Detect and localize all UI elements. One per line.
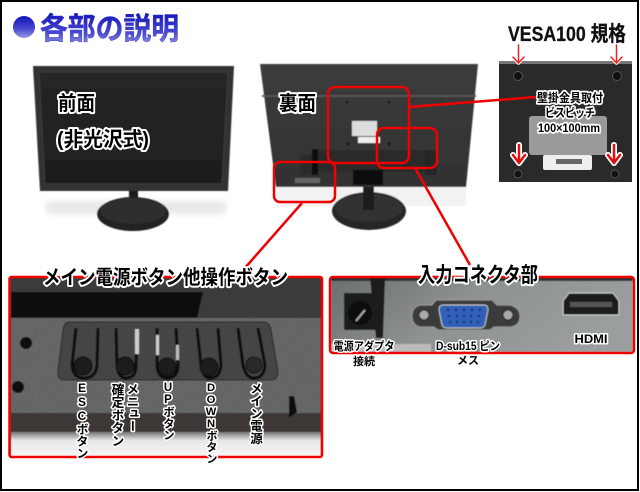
panel border	[10, 277, 322, 457]
label: front: (非光沢式)	[57, 128, 149, 151]
HDMI port	[563, 293, 619, 315]
photo: connector close-up	[331, 277, 633, 352]
button labels: メニュー	[125, 383, 139, 432]
heading: buttons: メイン電源ボタン他操作ボタン	[43, 266, 288, 289]
callouts: red highlight boxes and connector lines	[244, 87, 536, 269]
photo: monitor back	[260, 64, 478, 230]
panel border	[330, 277, 634, 353]
connector labels	[334, 332, 608, 368]
photo: monitor front	[33, 66, 234, 231]
connector labels: メス	[457, 355, 479, 367]
button labels: UPボタン	[162, 382, 175, 440]
button labels: DOWNボタン	[205, 382, 218, 464]
panel: power and operation buttons	[10, 266, 322, 464]
label: back: 裏面	[279, 92, 316, 115]
connector labels: 電源アダプタ	[334, 339, 394, 353]
label: front	[57, 92, 149, 151]
label: wall mount pitch: 壁掛金具取付	[537, 90, 603, 105]
button labels: メイン電源	[248, 382, 262, 445]
panel: input connectors	[330, 264, 634, 368]
label: front: 前面	[58, 92, 95, 115]
arrows: VESA screw positions	[513, 45, 622, 163]
button labels: 確定ボタン	[110, 382, 124, 447]
photo: button close-up	[10, 277, 322, 456]
label: wall mount pitch: 100×100mm	[538, 121, 600, 135]
button labels: ESCボタン	[75, 381, 89, 459]
VGA connector	[412, 300, 520, 330]
title: 各部の説明	[40, 13, 179, 46]
label: wall mount pitch: ビスピッチ	[545, 105, 595, 120]
connector labels: 接続	[353, 354, 375, 368]
connector labels: D-sub15 ピン	[436, 340, 500, 353]
label: wall mount pitch	[537, 90, 603, 135]
connector labels: HDMI	[574, 332, 608, 346]
button labels	[75, 381, 262, 464]
heading: connectors: 入力コネクタ部	[418, 264, 538, 287]
photo: VESA panel	[499, 61, 632, 182]
